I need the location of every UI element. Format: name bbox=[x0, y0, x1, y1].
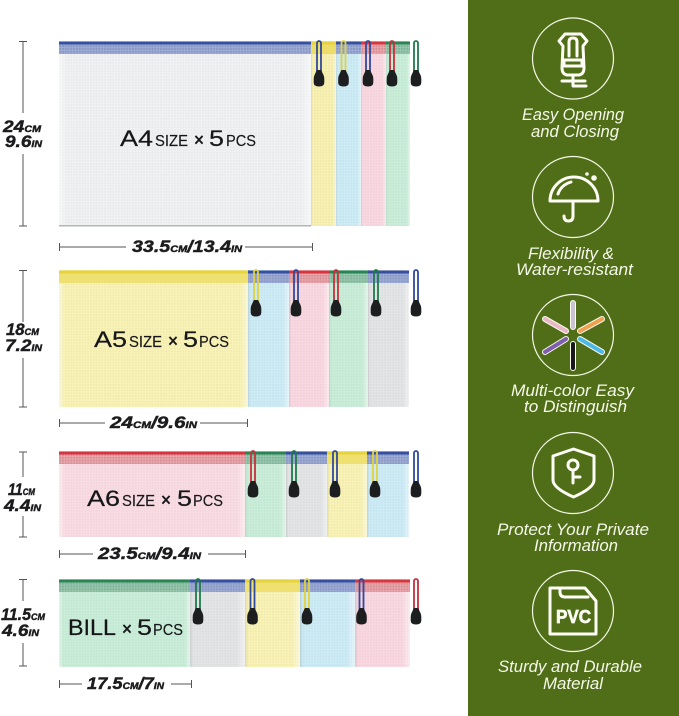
label: A5 size: SIZE bbox=[129, 334, 162, 351]
dimension: A6 height: 11CM bbox=[8, 480, 36, 499]
label: A4 size: PCS bbox=[226, 133, 256, 150]
label: A5 size: 5 bbox=[183, 327, 198, 352]
pouch: A5 pink bbox=[289, 270, 329, 407]
text: water resistant caption bbox=[516, 245, 635, 279]
zipper pull: green bbox=[371, 270, 381, 316]
pouch: A6 blue bbox=[367, 451, 409, 537]
zipper pull: blue bbox=[356, 579, 367, 624]
label: A5 size: PCS bbox=[199, 334, 229, 351]
label: A6 size: SIZE bbox=[122, 493, 155, 510]
zipper pull: blue bbox=[247, 579, 258, 624]
feature: easy opening bbox=[522, 18, 624, 141]
dimension: A6 width: 23.5 CM/9.4 IN bbox=[97, 544, 202, 563]
text: durable caption bbox=[498, 658, 642, 693]
label: A4 size: × bbox=[194, 130, 204, 150]
feature: durable bbox=[498, 570, 642, 693]
feature: water resistant bbox=[516, 156, 635, 279]
pouch: A5 green bbox=[329, 270, 368, 407]
icon: umbrella bbox=[532, 156, 614, 238]
zipper pull: red bbox=[387, 41, 397, 86]
zipper pull: green bbox=[193, 579, 203, 624]
dimension: A4 width: 33.5 CM/13.4 IN bbox=[132, 237, 243, 256]
label: bill size bbox=[68, 615, 183, 640]
pouch: A6 green bbox=[245, 451, 286, 537]
label: bill size: BILL bbox=[68, 615, 116, 640]
text: durable caption: Material bbox=[543, 675, 603, 693]
zipper pull: yellow bbox=[302, 579, 312, 624]
pouch: bill yellow bbox=[245, 579, 300, 667]
zipper pull: blue bbox=[314, 41, 324, 86]
text: water resistant caption: Water-resistant bbox=[516, 261, 635, 279]
pouch: A6 gray bbox=[286, 451, 327, 537]
dimension: A5 height bbox=[5, 270, 43, 407]
panel: bill pouches row bbox=[59, 579, 421, 667]
text: privacy caption bbox=[497, 521, 649, 555]
pouch: A5 gray bbox=[368, 270, 409, 407]
panel: A6 pouches row bbox=[59, 451, 421, 537]
text: multi color caption bbox=[511, 382, 635, 416]
dimension: A5 width bbox=[60, 413, 248, 432]
zipper pull: red bbox=[248, 451, 258, 498]
pouch: A4 pink bbox=[361, 41, 386, 226]
text: multi color caption: to Distinguish bbox=[524, 398, 627, 416]
label: A6 size: × bbox=[161, 490, 171, 510]
dimension: A4 height: 24 CM bbox=[2, 117, 42, 136]
dimension: A4 height: 9.6 IN bbox=[5, 132, 43, 151]
text: easy opening caption: Easy Opening bbox=[522, 106, 624, 124]
label: A4 size: A4 bbox=[120, 126, 153, 151]
dimension: bill width: 17.5 CM/7IN bbox=[87, 674, 165, 693]
dimension: A6 width bbox=[60, 544, 246, 563]
feature: multi color bbox=[511, 294, 635, 416]
panel: A5 pouches row bbox=[59, 270, 421, 407]
feature: privacy bbox=[497, 432, 649, 555]
dimension: A5 height: 18CM bbox=[6, 320, 40, 339]
dimension: bill height: 11.5CM bbox=[1, 605, 46, 624]
dimension: A4 width bbox=[60, 237, 312, 256]
dimension: bill height bbox=[1, 579, 46, 666]
zipper pull: blue bbox=[330, 451, 340, 498]
label: A5 size: A5 bbox=[94, 327, 127, 352]
dimension: A6 height bbox=[3, 452, 42, 537]
label: A4 size: SIZE bbox=[155, 133, 188, 150]
pouch: bill blue bbox=[300, 579, 355, 667]
label: A5 size: × bbox=[168, 331, 178, 351]
icon: colored sticks bbox=[532, 294, 614, 376]
label: A5 size bbox=[94, 327, 229, 352]
label: A4 size: 5 bbox=[209, 126, 224, 151]
dimension: A5 width: 24 CM/9.6 IN bbox=[109, 413, 198, 432]
zipper pull: yellow bbox=[338, 41, 349, 86]
label: bill size: × bbox=[122, 619, 132, 639]
label: A6 size: A6 bbox=[87, 486, 120, 511]
pouch: A4 blue bbox=[336, 41, 361, 226]
dimension: bill height: 4.6 IN bbox=[1, 621, 40, 640]
icon: shield with key bbox=[532, 432, 614, 514]
pouch: A6 pink bbox=[59, 451, 245, 537]
label: A4 size bbox=[120, 126, 256, 151]
dimension: bill width bbox=[60, 674, 192, 693]
pouch: A4 white bbox=[59, 41, 311, 226]
zipper pull: blue bbox=[363, 41, 373, 86]
pouch: A5 blue bbox=[248, 270, 289, 407]
pouch: bill green bbox=[59, 579, 190, 667]
dimension: A4 height bbox=[2, 41, 43, 226]
panel: A4 pouches row bbox=[59, 41, 421, 226]
icon: zipper slider bbox=[532, 18, 614, 99]
zipper pull: blue bbox=[411, 270, 421, 316]
zipper pull: red bbox=[411, 579, 421, 624]
text: durable caption: Sturdy and Durable bbox=[498, 658, 642, 676]
icon: PVC file bbox=[532, 570, 614, 652]
text: water resistant caption: Flexibility & bbox=[528, 245, 614, 263]
zipper pull: blue bbox=[411, 451, 421, 498]
zipper pull: yellow bbox=[370, 451, 380, 498]
label: A6 size: 5 bbox=[177, 486, 192, 511]
pouch: A4 yellow bbox=[311, 41, 336, 226]
zipper pull: green bbox=[411, 41, 421, 86]
text: privacy caption: Information bbox=[534, 537, 618, 555]
zipper pull: blue bbox=[291, 270, 301, 316]
pouch: A5 yellow bbox=[59, 270, 248, 407]
label: bill size: 5 bbox=[137, 615, 152, 640]
pouch: bill gray bbox=[190, 579, 245, 667]
zipper pull: yellow bbox=[251, 270, 261, 316]
label: A6 size: PCS bbox=[193, 493, 223, 510]
label: bill size: PCS bbox=[153, 622, 183, 639]
text: easy opening caption bbox=[522, 106, 624, 141]
dimension: A6 height: 4.4 IN bbox=[3, 496, 42, 515]
dimension: A5 height: 7.2 IN bbox=[5, 336, 43, 355]
pouch: bill pink bbox=[355, 579, 410, 667]
pouch: A6 yellow bbox=[327, 451, 367, 537]
text: multi color caption: Multi-color Easy bbox=[511, 382, 635, 400]
icon: PVC file: PVC bbox=[556, 607, 591, 627]
zipper pull: red bbox=[331, 270, 341, 316]
text: easy opening caption: and Closing bbox=[531, 123, 619, 141]
pouch: A4 green bbox=[386, 41, 410, 226]
label: A6 size bbox=[87, 486, 223, 511]
text: privacy caption: Protect Your Private bbox=[497, 521, 649, 539]
zipper pull: green bbox=[289, 451, 299, 498]
panel: features sidebar bbox=[468, 0, 679, 716]
panel: sizes background bbox=[0, 0, 468, 716]
